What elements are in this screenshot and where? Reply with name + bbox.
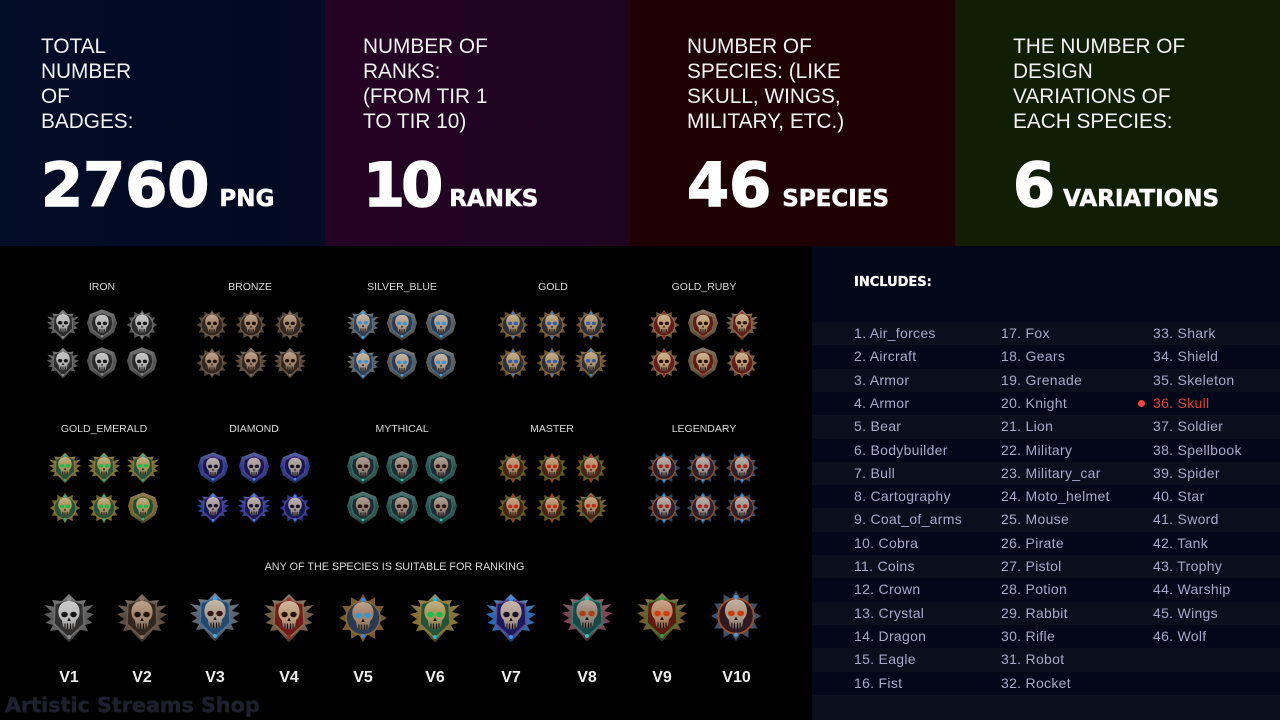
list column 2: 30. Rifle [1001, 628, 1055, 644]
list column 2: 32. Rocket [1001, 674, 1071, 690]
heading: includes: INCLUDES: [854, 274, 932, 290]
list column 1: 13. Crystal [854, 605, 924, 621]
caption: species suitable for ranking: ANY OF THE SPECIES IS SUITABLE FOR RANKING [265, 561, 524, 573]
list column 1: 1. Air_forces [854, 325, 936, 341]
list column 3: 46. Wolf [1153, 628, 1206, 644]
tier group: gold emerald [49, 423, 159, 524]
list column 3: 42. Tank [1153, 535, 1208, 551]
badge: V1 iron: V1 [59, 669, 79, 686]
highlighted item: skull: 36. Skull [1153, 395, 1209, 411]
list column 1: 7. Bull [854, 465, 895, 481]
list column 2: 25. Mouse [1001, 511, 1069, 527]
stat: 10 ranks: 10 RANKS [363, 151, 538, 221]
tier group: gold ruby [649, 281, 758, 379]
list column 2: 22. Military [1001, 442, 1072, 458]
icon: red dot marker [1138, 400, 1145, 407]
tier group: bronze: BRONZE [228, 281, 272, 293]
heading: number of ranks [363, 34, 488, 133]
badge: V2 bronze: V2 [132, 669, 152, 686]
list column 2: 31. Robot [1001, 651, 1064, 667]
tier group: diamond [197, 423, 310, 524]
list column 1: 8. Cartography [854, 488, 951, 504]
heading: number of species: SPECIES: (LIKE [687, 60, 841, 83]
tier group: diamond: DIAMOND [229, 423, 279, 435]
heading: number of species: NUMBER OF [687, 34, 812, 58]
tier group: master [498, 423, 607, 524]
tier group: legendary: LEGENDARY [672, 423, 736, 435]
panel: number of ranks [325, 0, 630, 246]
badge: V6 gold emerald: V6 [425, 669, 445, 686]
watermark: Artistic Streams Shop [5, 693, 260, 717]
list column 1: 10. Cobra [854, 535, 918, 551]
tier group: mythical [347, 423, 457, 525]
stat: 6 variations: 6 VARIATIONS [1013, 151, 1219, 221]
list column 2: 24. Moto_helmet [1001, 488, 1110, 504]
heading: total number of badges [41, 34, 133, 133]
heading: total number of badges: OF [41, 85, 70, 108]
tier group: bronze [197, 281, 306, 379]
list column 1: 11. Coins [854, 558, 915, 574]
heading: number of design variations: VARIATIONS OF [1013, 85, 1171, 108]
tier group: silver blue: SILVER_BLUE [367, 281, 437, 293]
list column 2: 19. Grenade [1001, 372, 1082, 388]
list column 2: 27. Pistol [1001, 558, 1062, 574]
list column 2: 28. Potion [1001, 581, 1067, 597]
stat: 46 species: 46 SPECIES [687, 151, 889, 221]
badge: V7 diamond [486, 594, 536, 686]
list column 2: 17. Fox [1001, 325, 1050, 341]
list column 1: 6. Bodybuilder [854, 442, 948, 458]
list column 3 [1153, 325, 1242, 644]
heading: number of design variations: DESIGN [1013, 60, 1093, 83]
list column 3: 34. Shield [1153, 348, 1218, 364]
badge: V5 gold: V5 [353, 669, 373, 686]
tier group: master: MASTER [530, 423, 574, 435]
heading: number of ranks: (FROM TIR 1 [363, 85, 487, 108]
heading: number of ranks: TO TIR 10) [363, 110, 466, 133]
list column 1: 16. Fist [854, 674, 902, 690]
tier group: mythical: MYTHICAL [375, 423, 429, 435]
list column 2: 29. Rabbit [1001, 605, 1068, 621]
list column 3: 43. Trophy [1153, 558, 1222, 574]
badge: V9 master: V9 [652, 669, 672, 686]
list column 2: 20. Knight [1001, 395, 1067, 411]
list column 2: 26. Pirate [1001, 535, 1064, 551]
badge: V7 diamond: V7 [501, 669, 521, 686]
tier group: silver blue [347, 281, 456, 380]
list column 2: 18. Gears [1001, 348, 1065, 364]
heading: number of species: MILITARY, ETC.) [687, 110, 844, 133]
badge: V6 gold emerald [410, 594, 460, 686]
tier group: legendary [648, 423, 758, 524]
list column 3: 37. Soldier [1153, 418, 1223, 434]
stat: 2760 PNG: 2760 PNG [41, 151, 274, 221]
list column 1: 15. Eagle [854, 651, 916, 667]
list column 3: 35. Skeleton [1153, 372, 1234, 388]
badge: V5 gold [339, 594, 387, 686]
heading: number of ranks: RANKS: [363, 60, 440, 83]
list column 3: 33. Shark [1153, 325, 1216, 341]
list column 2: 23. Military_car [1001, 465, 1101, 481]
list column 3: 38. Spellbook [1153, 442, 1242, 458]
badge: V3 silver blue: V3 [205, 669, 225, 686]
list column 1 [854, 325, 962, 690]
badge: V9 master [637, 593, 687, 686]
heading: number of species: SKULL, WINGS, [687, 85, 841, 108]
heading: total number of badges: TOTAL [41, 34, 106, 58]
badge: V4 gold ruby [264, 594, 314, 686]
badge: V8 mythical: V8 [577, 669, 597, 686]
list column 2: 21. Lion [1001, 418, 1053, 434]
panel: rank badge showcase [44, 281, 761, 686]
list column 3: 44. Warship [1153, 581, 1230, 597]
heading: number of ranks: NUMBER OF [363, 34, 488, 58]
panel: design variations [955, 0, 1280, 246]
tier group: gold: GOLD [538, 281, 568, 293]
list column 1: 2. Aircraft [854, 348, 916, 364]
panel: includes list [812, 246, 1280, 720]
list column 3: 45. Wings [1153, 605, 1218, 621]
badge: V10 legendary [711, 591, 761, 686]
list column 3: 40. Star [1153, 488, 1204, 504]
list column 2 [1001, 325, 1110, 690]
badge: V4 gold ruby: V4 [279, 669, 299, 686]
panel: number of species [630, 0, 955, 246]
tier group: iron: IRON [89, 281, 115, 293]
tier group: gold [498, 281, 607, 379]
list column 1: 9. Coat_of_arms [854, 511, 962, 527]
list column 3: 39. Spider [1153, 465, 1220, 481]
heading: number of design variations: THE NUMBER OF [1013, 34, 1185, 58]
panel: total badges [0, 0, 325, 246]
badge: V1 iron [44, 594, 94, 686]
heading: number of design variations [1013, 34, 1185, 133]
badge: V10 legendary: V10 [722, 669, 751, 686]
heading: number of design variations: EACH SPECIES: [1013, 110, 1172, 133]
tier group: iron [47, 281, 157, 379]
badge: V2 bronze [117, 594, 167, 686]
badge: V8 mythical [562, 593, 612, 686]
list column 1: 14. Dragon [854, 628, 926, 644]
badge: V3 silver blue [190, 593, 240, 686]
list column 1: 5. Bear [854, 418, 901, 434]
heading: number of species [687, 34, 844, 133]
tier group: gold ruby: GOLD_RUBY [672, 281, 736, 293]
heading: total number of badges: BADGES: [41, 110, 133, 133]
heading: total number of badges: NUMBER [41, 60, 131, 83]
list column 1: 3. Armor [854, 372, 909, 388]
list column 1: 12. Crown [854, 581, 921, 597]
tier group: gold emerald: GOLD_EMERALD [61, 423, 148, 435]
list column 1: 4. Armor [854, 395, 909, 411]
list column 3: 41. Sword [1153, 511, 1219, 527]
